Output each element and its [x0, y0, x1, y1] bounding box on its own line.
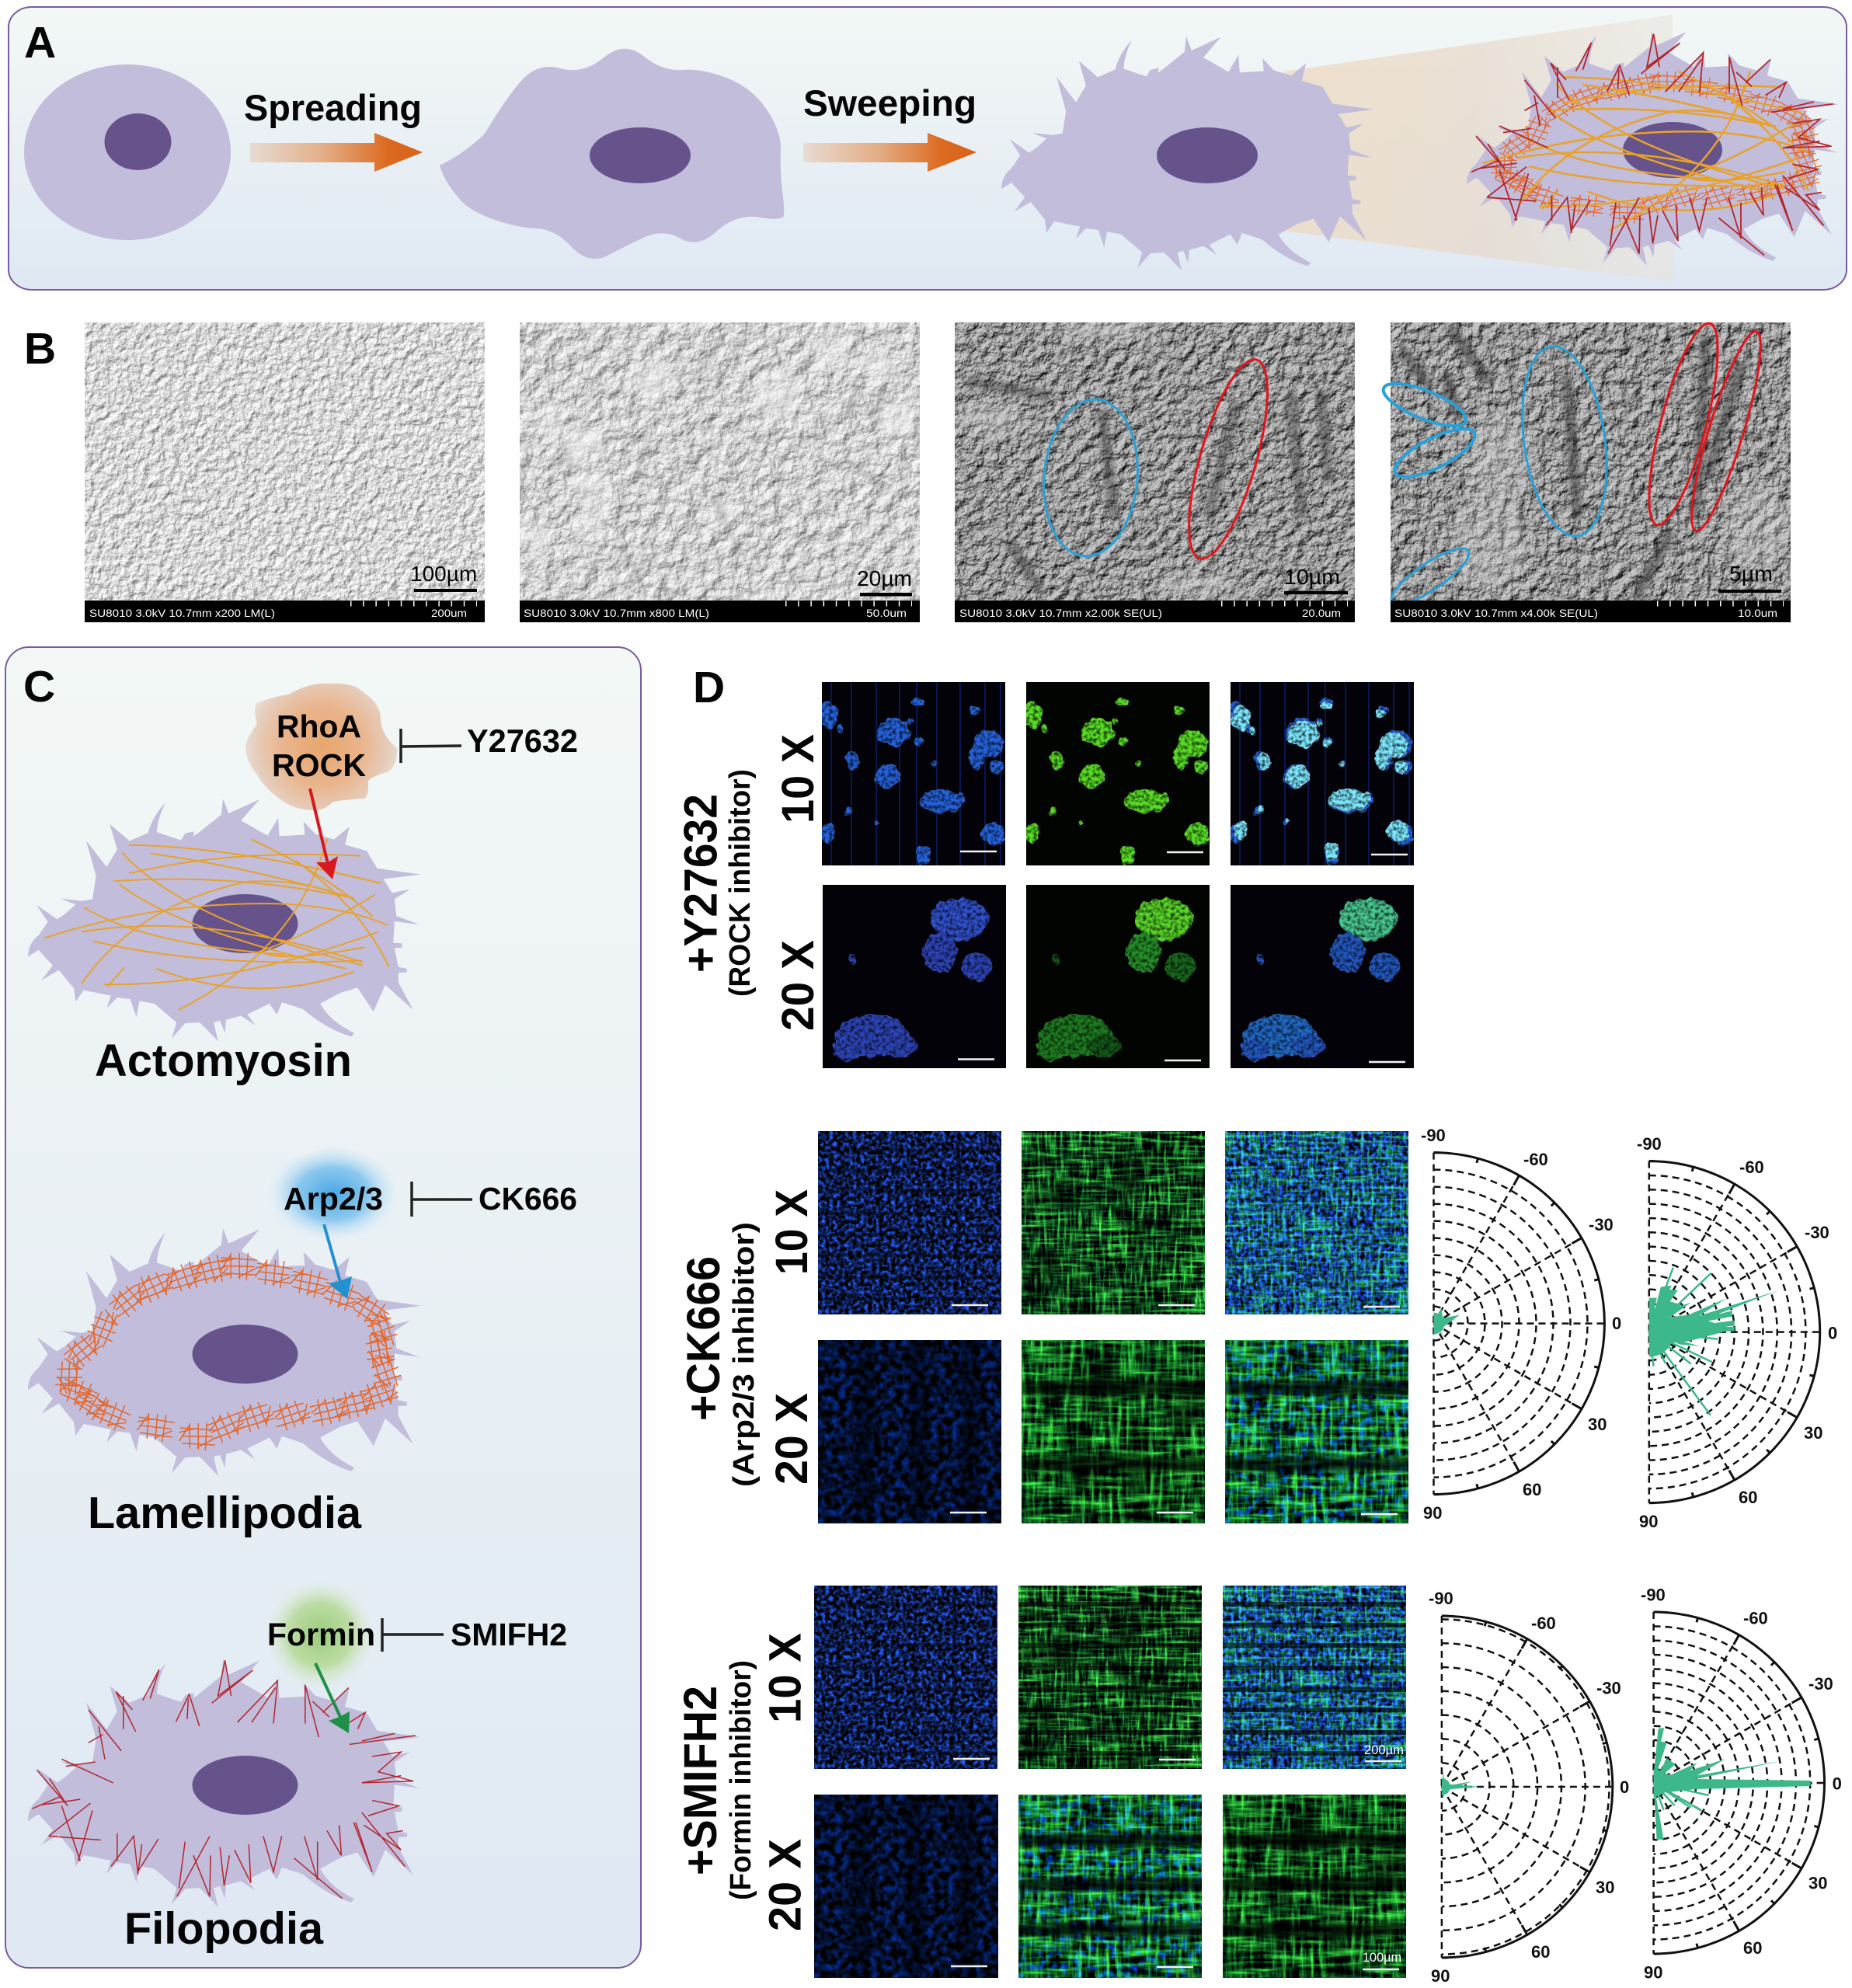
inhibitor SMIFH2 [382, 1617, 567, 1652]
polar chart CK666 right: -30 [1805, 1223, 1829, 1242]
blue ellipse [1037, 395, 1144, 560]
polar chart CK666 right: 60 [1739, 1488, 1757, 1507]
panel A: cell spreading and sweeping [9, 7, 1847, 290]
SEM image 1: 100µm [410, 562, 477, 586]
Y27632 images [819, 682, 1414, 1068]
Arp2/3 blob [267, 1146, 398, 1241]
SEM image 3 with annotations: SU8010 3.0kV 10.7mm x2.00k SE(UL) [959, 607, 1162, 619]
spiky cell [1001, 37, 1373, 270]
CK666 images [818, 1131, 1412, 1527]
red arrow [310, 789, 338, 879]
SEM image 2: SU8010 3.0kV 10.7mm x800 LM(L) [524, 607, 709, 619]
SMIFH2 row labels: 20 X [761, 1839, 811, 1931]
polar chart CK666 left: 90 [1423, 1503, 1442, 1523]
inhibitor CK666 [412, 1181, 577, 1217]
polar chart SMIFH2 left: -90 [1429, 1589, 1453, 1608]
zoom projection wedge [1284, 15, 1674, 282]
Filopodia label: Filopodia [124, 1904, 324, 1954]
panel C: cytoskeletal pathways [5, 647, 641, 1968]
Arp2/3 blob: Arp2/3 [284, 1181, 383, 1217]
polar chart SMIFH2 left: -60 [1531, 1614, 1556, 1633]
polar chart SMIFH2 left [1429, 1589, 1629, 1986]
Y27632 row labels: (ROCK inhibitor) [724, 769, 757, 997]
SMIFH2 row labels [674, 1633, 811, 1931]
lamellipodia cell [28, 1228, 420, 1476]
polar chart SMIFH2 left: 60 [1531, 1942, 1550, 1962]
RhoA ROCK blob: RhoA [277, 709, 361, 744]
polar chart CK666 right: -60 [1739, 1158, 1764, 1177]
polar chart CK666 right: 30 [1804, 1423, 1822, 1443]
SEM image 4 with annotations: 10.0um [1738, 607, 1777, 619]
Lamellipodia label: Lamellipodia [88, 1488, 362, 1538]
polar chart SMIFH2 left: 30 [1596, 1878, 1614, 1897]
SEM image 4 with annotations: SU8010 3.0kV 10.7mm x4.00k SE(UL) [1394, 607, 1598, 619]
polar chart CK666 right [1637, 1134, 1837, 1531]
SEM image 2: 20µm [857, 566, 912, 590]
polar chart SMIFH2 right: 60 [1743, 1938, 1762, 1958]
Formin blob [267, 1582, 375, 1687]
actomyosin cell [28, 799, 420, 1041]
polar chart SMIFH2 left: 0 [1620, 1777, 1629, 1797]
polar chart CK666 left [1421, 1126, 1621, 1523]
round cell [24, 64, 231, 240]
polar chart CK666 left: -30 [1589, 1215, 1614, 1234]
polar chart SMIFH2 left: -30 [1596, 1678, 1621, 1698]
CK666 row labels [677, 1189, 817, 1487]
RhoA ROCK blob [245, 684, 397, 810]
filopodia cell [28, 1659, 420, 1907]
CK666 row labels: 20 X [767, 1393, 817, 1485]
polar chart CK666 left: 0 [1612, 1314, 1621, 1333]
polar chart CK666 left: -90 [1421, 1126, 1446, 1145]
polar chart SMIFH2 right: 30 [1808, 1874, 1827, 1892]
SMIFH2 row labels: +SMIFH2 [674, 1686, 726, 1875]
SMIFH2 images: 200µm [1364, 1743, 1404, 1757]
blue ellipses [1378, 341, 1618, 613]
Formin blob: Formin [267, 1617, 375, 1652]
inhibitor CK666: CK666 [479, 1181, 577, 1217]
Y27632 row labels: 20 X [773, 940, 823, 1031]
SMIFH2 images [814, 1586, 1409, 1981]
blue arrow [324, 1224, 352, 1299]
polar chart CK666 right: 0 [1828, 1324, 1837, 1343]
label C: C [23, 662, 55, 712]
SEM image 1 [85, 322, 485, 622]
sweeping arrow [803, 133, 976, 172]
green arrow [315, 1663, 350, 1733]
red ellipse [1173, 352, 1283, 566]
RhoA ROCK blob: ROCK [272, 747, 366, 783]
polar chart CK666 right: -90 [1637, 1134, 1662, 1154]
polar chart SMIFH2 right: -60 [1743, 1608, 1768, 1628]
spiky cell with cytoskeleton [1467, 31, 1839, 266]
spread cell [440, 49, 784, 259]
SMIFH2 images: 100µm [1363, 1950, 1401, 1965]
inhibitor Y27632 [401, 722, 578, 763]
polar chart SMIFH2 right: 0 [1833, 1774, 1842, 1794]
label D: D [693, 663, 725, 712]
Y27632 row labels [674, 734, 823, 1031]
polar chart SMIFH2 right [1641, 1586, 1842, 1983]
CK666 row labels: +CK666 [677, 1256, 729, 1421]
SMIFH2 row labels: 10 X [761, 1633, 811, 1723]
red ellipses [1635, 318, 1773, 536]
Actomyosin label: Actomyosin [95, 1036, 352, 1086]
Y27632 row labels: +Y27632 [674, 794, 727, 973]
SEM image 3 with annotations: 20.0um [1302, 607, 1341, 619]
SEM image 2 [518, 322, 920, 622]
polar chart CK666 right: 90 [1639, 1512, 1658, 1531]
SEM image 4 with annotations [1378, 318, 1791, 622]
SEM image 1: SU8010 3.0kV 10.7mm x200 LM(L) [89, 607, 275, 619]
polar chart SMIFH2 left: 90 [1431, 1966, 1450, 1986]
sweeping label: Sweeping [803, 82, 976, 124]
polar chart SMIFH2 right: 90 [1644, 1963, 1662, 1983]
SEM image 4 with annotations: 5µm [1729, 562, 1773, 586]
label A: A [24, 18, 56, 68]
SEM image 1: 200um [431, 607, 467, 619]
CK666 row labels: (Arp2/3 inhibitor) [728, 1222, 761, 1487]
inhibitor Y27632: Y27632 [467, 722, 578, 759]
polar chart SMIFH2 right: -30 [1808, 1674, 1833, 1694]
spreading label: Spreading [244, 87, 422, 128]
label B: B [24, 324, 56, 374]
SEM image 3 with annotations [955, 319, 1355, 622]
polar chart SMIFH2 right: -90 [1641, 1586, 1666, 1605]
polar chart CK666 left: -60 [1523, 1150, 1548, 1169]
spreading arrow [250, 133, 423, 172]
CK666 row labels: 10 X [767, 1189, 817, 1275]
SMIFH2 row labels: (Formin inhibitor) [725, 1660, 757, 1900]
polar chart CK666 left: 30 [1588, 1415, 1607, 1434]
SEM image 2: 50.0um [866, 607, 907, 619]
Y27632 row labels: 10 X [773, 734, 823, 823]
SEM image 3 with annotations: 10µm [1284, 565, 1340, 589]
polar chart CK666 left: 60 [1523, 1480, 1541, 1499]
inhibitor SMIFH2: SMIFH2 [451, 1617, 567, 1652]
